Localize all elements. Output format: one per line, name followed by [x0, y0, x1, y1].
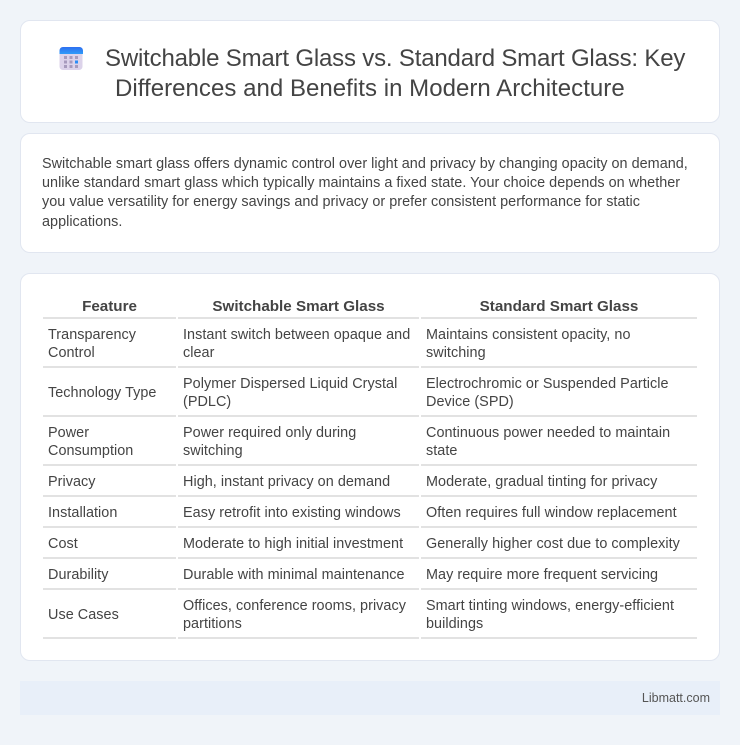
row: power consumption: Continuous power needed to maintain: [426, 425, 670, 441]
row: durability: Durable with minimal maintenance: [183, 567, 405, 583]
row: transparency control: switching: [426, 345, 486, 361]
table header: Standard Smart Glass: [480, 298, 638, 315]
row: cost: [48, 536, 680, 552]
intro text: Switchable smart glass offers dynamic control over light and privacy by changing opacity on demand,: [42, 156, 688, 172]
row: transparency control: Transparency: [48, 327, 136, 343]
row: use cases: partitions: [183, 616, 242, 632]
row: use cases: Smart tinting windows, energy-efficient: [426, 598, 674, 614]
table header: Switchable Smart Glass: [212, 298, 385, 315]
intro text: applications.: [42, 214, 122, 230]
row: privacy: Privacy: [48, 474, 96, 490]
intro text: unlike standard smart glass which typically maintains a fixed state. Your choice depends on whether: [42, 175, 680, 191]
row: technology type: Device (SPD): [426, 394, 514, 410]
row: technology type: Electrochromic or Suspended Particle: [426, 376, 669, 392]
row: power consumption: Power: [48, 425, 89, 441]
title: Switchable Smart Glass vs. Standard Smart Glass: Key: [105, 45, 685, 72]
row: privacy: High, instant privacy on demand: [183, 474, 390, 490]
row: power consumption: Power required only during: [183, 425, 356, 441]
row: power consumption: state: [426, 443, 457, 459]
row: privacy: [48, 474, 658, 490]
row: use cases: Offices, conference rooms, privacy: [183, 598, 406, 614]
row: cost: Cost: [48, 536, 78, 552]
row: technology type: Technology Type: [48, 385, 156, 401]
panel: intro: [20, 133, 720, 253]
row: transparency control: clear: [183, 345, 214, 361]
row: power consumption: [48, 425, 670, 459]
row: technology type: (PDLC): [183, 394, 231, 410]
row: power consumption: Consumption: [48, 443, 133, 459]
title: Differences and Benefits in Modern Architecture: [115, 75, 625, 102]
row: durability: May require more frequent servicing: [426, 567, 658, 583]
table header: Feature: [82, 298, 137, 315]
intro text: you value versatility for energy savings and privacy or prefer consistent performance for static: [42, 194, 640, 210]
row: use cases: [48, 598, 674, 632]
row: durability: Durability: [48, 567, 108, 583]
row: cost: Moderate to high initial investment: [183, 536, 403, 552]
row: transparency control: [48, 327, 631, 361]
row: installation: [48, 505, 677, 521]
row: installation: Often requires full window replacement: [426, 505, 677, 521]
comparison table: [43, 298, 697, 639]
row: power consumption: switching: [183, 443, 243, 459]
row: technology type: Polymer Dispersed Liquid Crystal: [183, 376, 397, 392]
row: durability: [48, 567, 658, 583]
row: cost: Generally higher cost due to complexity: [426, 536, 680, 552]
row: use cases: Use Cases: [48, 607, 119, 623]
title: [105, 45, 686, 102]
row: use cases: buildings: [426, 616, 483, 632]
row: transparency control: Instant switch between opaque and: [183, 327, 410, 343]
row: transparency control: Control: [48, 345, 95, 361]
table header: [82, 298, 638, 315]
row: installation: Easy retrofit into existing windows: [183, 505, 401, 521]
panel: comparison table: [20, 273, 720, 661]
row: privacy: Moderate, gradual tinting for privacy: [426, 474, 657, 490]
footer bar: [20, 681, 720, 715]
footer text: Libmatt.com: Libmatt.com: [642, 691, 710, 705]
row: technology type: [48, 376, 669, 410]
intro text: [42, 156, 688, 230]
row: installation: Installation: [48, 505, 117, 521]
panel: title card: [20, 20, 720, 123]
icon: calendar: [60, 47, 83, 70]
row: transparency control: Maintains consistent opacity, no: [426, 327, 631, 343]
